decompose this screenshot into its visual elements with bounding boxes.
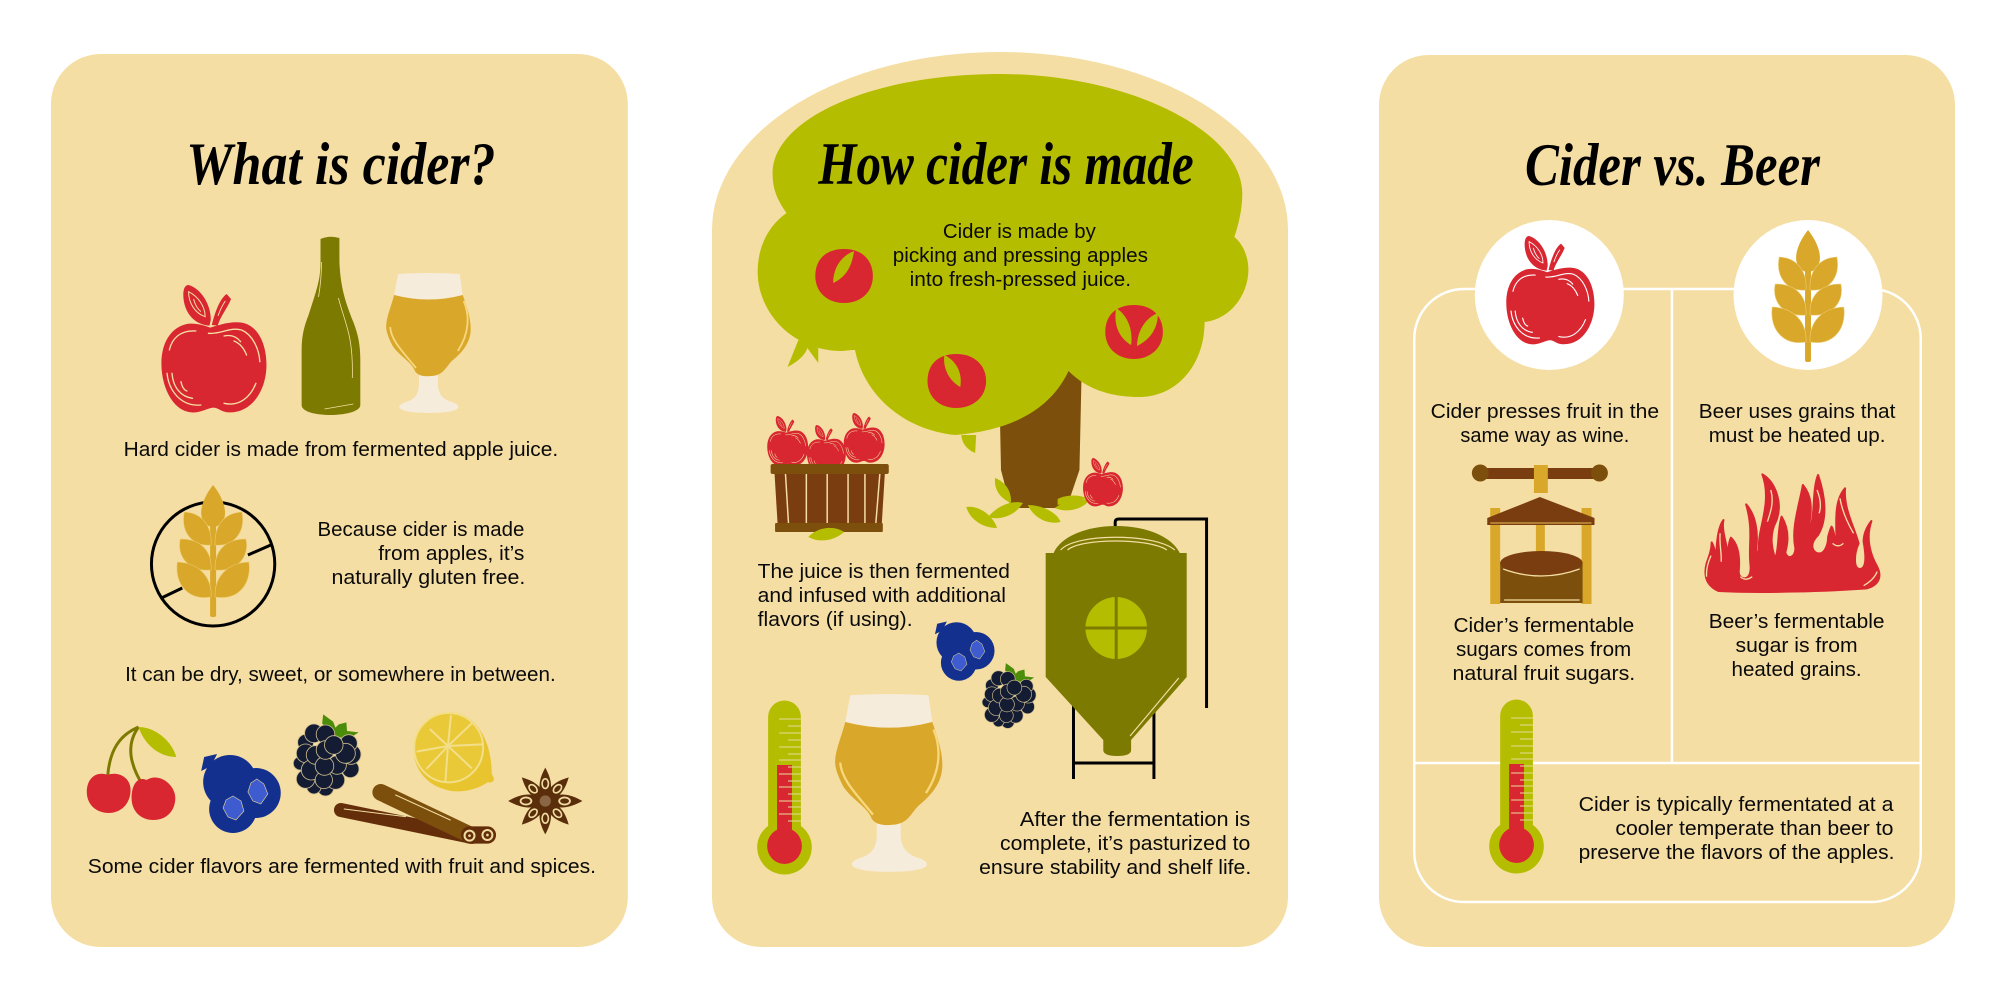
text: fermented (758, 561, 1010, 631)
text: gluten free (318, 519, 525, 589)
text: picking and pressing (893, 221, 1148, 291)
icon: fermentation tank (1046, 519, 1207, 779)
text: picking and pressing: picking and pressing apples (893, 245, 1148, 267)
text: pasteurized: complete, it’s pasturized to (1000, 833, 1250, 855)
icon: tree trunk (1000, 365, 1081, 508)
text: beer uses grains (1699, 401, 1896, 447)
panel: Cider vs. Beer (1379, 55, 1955, 947)
icon: bottle (302, 237, 360, 415)
panel: What is cider? (51, 54, 628, 947)
icon: lemon (414, 712, 494, 791)
text: dry or sweet: It can be dry, sweet, or somewhere in between. (125, 664, 556, 686)
icon: basket of apples (767, 413, 889, 540)
icon: fallen leaves (966, 478, 1089, 528)
text: cider sugars: sugars comes from (1456, 639, 1631, 661)
icon: blueberries (201, 754, 281, 833)
text: gluten free: Because cider is made (318, 519, 524, 541)
text: beer sugars: heated grains. (1732, 659, 1862, 681)
text: fruit and spices: Some cider flavors are fermented with fruit and spices. (88, 856, 596, 878)
icon: fallen apple (1083, 458, 1123, 506)
small leaves on canopy (787, 340, 976, 453)
icon: large cider glass (835, 694, 942, 872)
text: fermented: flavors (if using). (758, 609, 913, 631)
text: picking and pressing: into fresh-pressed juice. (910, 269, 1131, 291)
text: fermented: The juice is then fermented (758, 561, 1010, 583)
icon: fruit press (1472, 464, 1608, 604)
icon: blackberry (293, 714, 361, 796)
panel background (1379, 55, 1955, 947)
panel: How cider is made (712, 52, 1288, 947)
icon: cinnamon sticks (341, 792, 492, 841)
text: gluten free: from apples, it’s (378, 543, 524, 565)
text: pasteurized: ensure stability and shelf life. (979, 857, 1251, 879)
text: fermentation temperature: preserve the flavors of the apples. (1579, 842, 1894, 864)
icon: tree apple 1 (815, 249, 873, 303)
icon: wheat in circle (1734, 220, 1883, 370)
icon: apple in circle (1475, 220, 1624, 370)
panel background dome (712, 52, 1288, 947)
heading: How cider is made: How cider is made (817, 131, 1194, 197)
text: fermentation temperature: Cider is typically fermentated at a (1579, 794, 1894, 816)
text: cider presses fruit: Cider presses fruit in the (1431, 401, 1659, 423)
text: cider presses fruit: same way as wine. (1460, 425, 1629, 447)
panel background (51, 54, 628, 947)
text: picking and pressing: Cider is made by (943, 221, 1096, 243)
icon: thermometer (1489, 700, 1544, 874)
heading: Cider vs. Beer: Cider vs. Beer (1525, 132, 1821, 198)
icon: tree canopy (758, 74, 1248, 435)
heading: What is cider?: What is cider? (186, 131, 496, 197)
icon: blueberries (935, 622, 995, 681)
icon: cider glass (386, 273, 471, 413)
text: cider sugars: Cider’s fermentable (1453, 615, 1634, 637)
icon: star anise (508, 768, 582, 834)
icon: tree apple 3 (1105, 305, 1163, 359)
text: gluten free: naturally gluten free. (331, 567, 525, 589)
text: fermented: and infused with additional (758, 585, 1006, 607)
icon: tree apple 2 (928, 354, 986, 408)
icon: no gluten wheat (151, 485, 275, 626)
icon: thermometer (757, 700, 812, 874)
text: beer sugars: sugar is from (1736, 635, 1858, 657)
text: hard cider: Hard cider is made from fermented apple juice. (124, 439, 558, 461)
text: cider sugars: natural fruit sugars. (1452, 663, 1635, 685)
text: beer uses grains: Beer uses grains that (1699, 401, 1896, 423)
text: pasteurized: After the fermentation is (1020, 809, 1250, 831)
text: cider sugars (1452, 615, 1635, 685)
icon: blackberry (982, 663, 1036, 728)
text: cider presses fruit (1431, 401, 1659, 447)
text: beer uses grains: must be heated up. (1709, 425, 1885, 447)
text: fermentation temperature (1579, 794, 1894, 864)
icon: apple (161, 285, 266, 412)
text: beer sugars: Beer’s fermentable (1709, 611, 1884, 633)
text: beer sugars (1709, 611, 1884, 681)
text: fermentation temperature: cooler temperate than beer to (1615, 818, 1893, 840)
icon: cherries (87, 727, 176, 820)
icon: fire (1705, 474, 1879, 592)
text: pasteurized (979, 809, 1251, 879)
comparison frame (1414, 289, 1921, 902)
